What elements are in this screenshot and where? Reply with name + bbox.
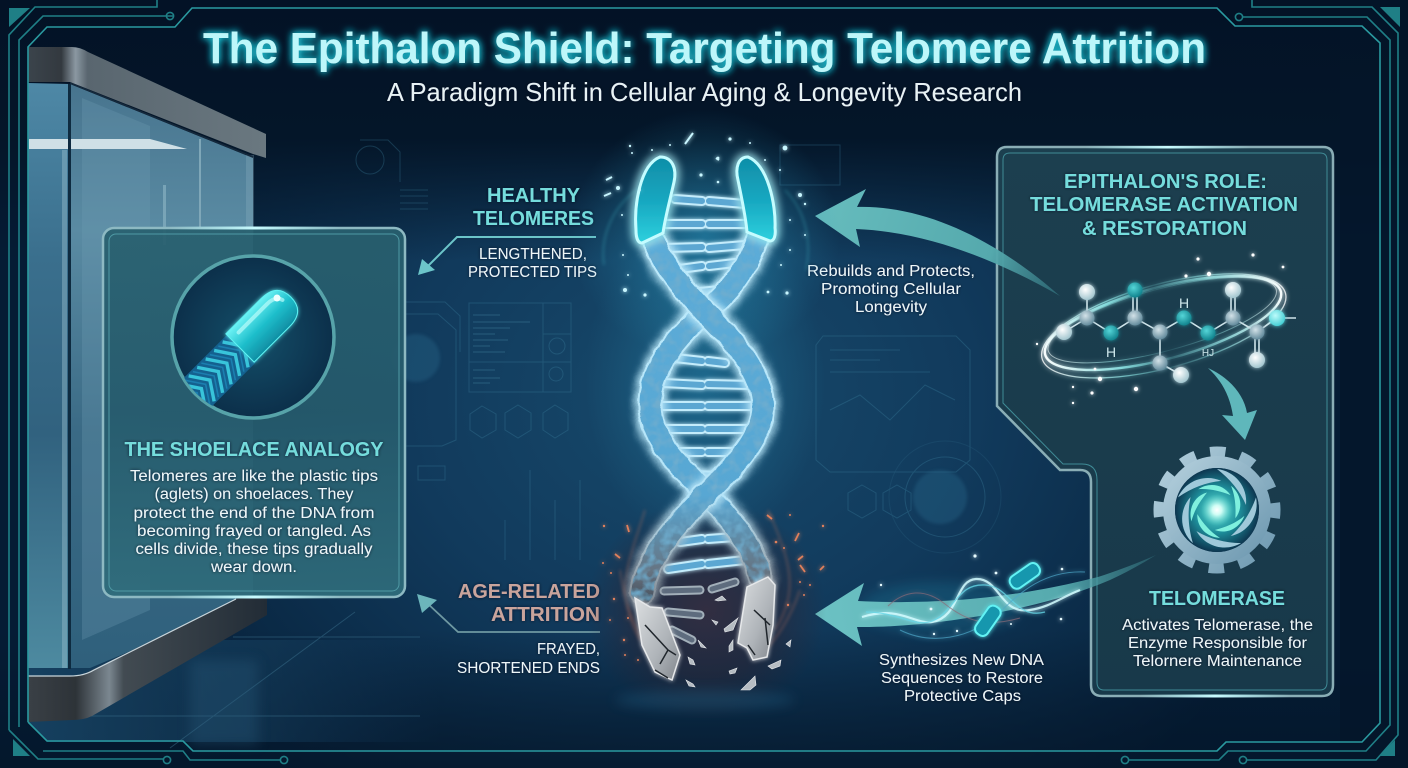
- floor: [28, 640, 440, 742]
- heading: healthy telomeres: TELOMERES: [473, 207, 594, 230]
- atom labels: HJ: [1202, 348, 1214, 359]
- text: rebuilds and protects: [807, 263, 975, 316]
- ember particles: [602, 514, 824, 661]
- label: healthy telomeres: [418, 184, 597, 281]
- broken rungs: [664, 582, 735, 640]
- text: frayed ends: [457, 641, 600, 677]
- ambient glows: [570, 110, 840, 720]
- text: synthesizes new DNA: [879, 652, 1045, 705]
- sparkles: [1036, 253, 1284, 404]
- cyan particles: [604, 133, 806, 297]
- heading: epithalon's role: [1030, 170, 1298, 240]
- text: telomerase body: Activates Telomerase, the: [1122, 617, 1313, 634]
- pointer arrow: [417, 594, 600, 632]
- icon: telomerase gear: [1153, 446, 1281, 574]
- text: shoelace analogy body: wear down.: [210, 559, 297, 576]
- text: synthesizes new DNA: Protective Caps: [904, 688, 1021, 705]
- strand: front: [642, 243, 763, 593]
- label: age-related attrition: [417, 580, 600, 677]
- text: synthesizes new DNA: Synthesizes New DNA: [879, 652, 1045, 669]
- text: lengthened tips: [468, 246, 597, 281]
- text: shoelace analogy body: [130, 468, 378, 576]
- metal base: [28, 597, 267, 722]
- text: shoelace analogy body: becoming frayed or tangled. As: [137, 523, 371, 540]
- text: synthesizes new DNA: Sequences to Restore: [881, 670, 1043, 687]
- text: telomerase body: Enzyme Responsible for: [1128, 635, 1307, 652]
- text: rebuilds and protects: Longevity: [855, 299, 927, 316]
- text: shoelace analogy body: cells divide, these tips gradually: [136, 541, 373, 558]
- icon: braided lace: [184, 336, 258, 406]
- text: shoelace analogy body: (aglets) on shoelaces. They: [154, 486, 354, 503]
- molecule: epithalon with energy rings: [1031, 253, 1296, 404]
- text: lengthened tips: PROTECTED TIPS: [468, 264, 597, 281]
- arrow: epithalon to healthy telomeres: [815, 189, 1060, 296]
- atom labels: [1106, 295, 1214, 360]
- heading: healthy telomeres: [473, 184, 594, 230]
- atoms: [1056, 282, 1285, 383]
- heading: epithalon's role: EPITHALON'S ROLE:: [1064, 170, 1267, 193]
- DNA fragments: [973, 561, 1042, 638]
- text: telomerase body: Telornere Maintenance: [1133, 653, 1302, 670]
- atom labels: H: [1106, 344, 1116, 360]
- heading: shoelace analogy: THE SHOELACE ANALOGY: [124, 438, 384, 461]
- orange wisps: [620, 510, 800, 665]
- text: rebuilds and protects: Promoting Cellular: [821, 281, 961, 298]
- text: frayed ends: SHORTENED ENDS: [457, 660, 600, 677]
- faint HUD overlays: [356, 140, 1001, 560]
- faint cell blob hologram: [392, 334, 967, 524]
- bonds: [1064, 290, 1296, 375]
- energy rings: [1031, 253, 1296, 399]
- panel: epithalon's role: [997, 146, 1333, 698]
- icon: shoelace aglet: [162, 256, 334, 428]
- cyan wisps: [603, 190, 808, 270]
- text: telomerase body: [1122, 617, 1313, 670]
- pointer arrow: [418, 237, 596, 275]
- heading: epithalon's role: & RESTORATION: [1082, 217, 1247, 240]
- heading: telomerase: TELOMERASE: [1149, 587, 1285, 610]
- cap shards: [686, 596, 791, 690]
- frayed cap: left: [635, 598, 680, 680]
- frayed cap: right: [738, 577, 775, 660]
- subtitle: A Paradigm Shift in Cellular Aging & Longevity Research: [387, 77, 1022, 107]
- icon: aglet cap: [226, 283, 305, 362]
- rungs: [662, 199, 750, 640]
- atom labels: H: [1179, 295, 1189, 311]
- glass panes: [28, 83, 70, 668]
- healthy cap: right: [737, 157, 775, 241]
- arrow: molecule to telomerase: [1208, 368, 1257, 440]
- heading: healthy telomeres: HEALTHY: [487, 184, 580, 207]
- DNA helix: [570, 110, 840, 720]
- energy wave: [862, 572, 1085, 638]
- glass display case: [28, 47, 440, 748]
- strand: back: [650, 240, 760, 577]
- heading: age-related attrition: ATTRITION: [491, 603, 600, 626]
- sparkles: [880, 554, 1063, 635]
- text: frayed ends: FRAYED,: [537, 641, 600, 658]
- panel: shoelace analogy: [103, 226, 405, 598]
- heading: epithalon's role: TELOMERASE ACTIVATION: [1030, 193, 1298, 216]
- heading: age-related attrition: [458, 580, 600, 626]
- healthy cap: left: [636, 157, 675, 243]
- text: shoelace analogy body: protect the end of the DNA from: [134, 505, 374, 522]
- text: shoelace analogy body: Telomeres are like the plastic tips: [130, 468, 378, 485]
- arrow: telomerase to attrition: [815, 554, 1156, 646]
- heading: age-related attrition: AGE-RELATED: [458, 580, 600, 603]
- metal top rail: [28, 47, 266, 158]
- text: lengthened tips: LENGTHENED,: [479, 246, 587, 263]
- text: rebuilds and protects: Rebuilds and Protects,: [807, 263, 975, 280]
- title: The Epithalon Shield: Targeting Telomere Attrition: [203, 24, 1206, 73]
